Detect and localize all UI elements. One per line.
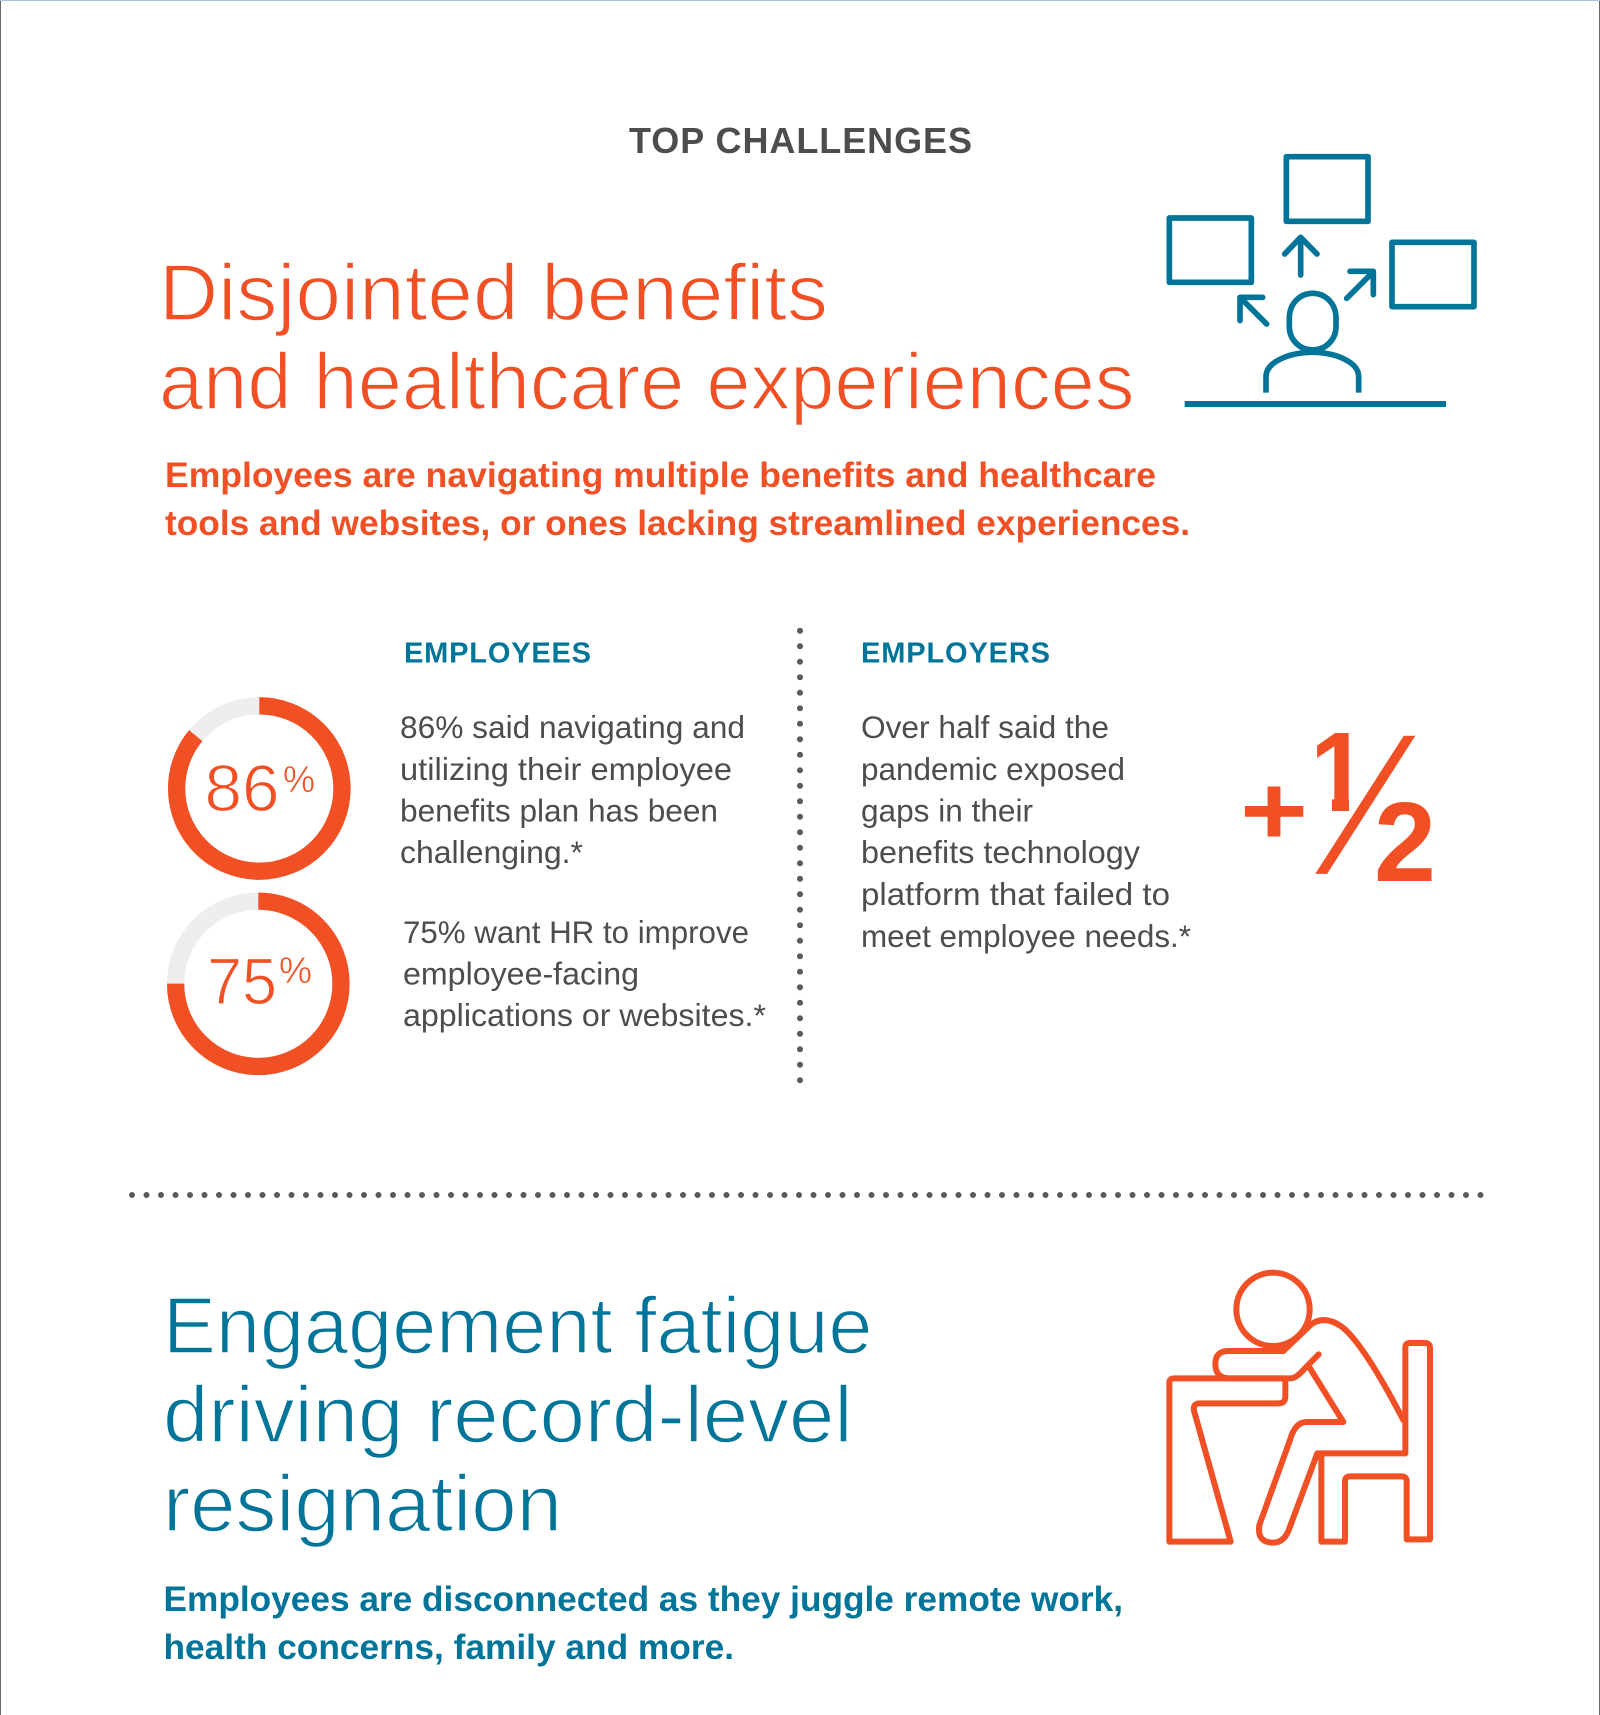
icon: tired person at desk (1169, 1273, 1430, 1543)
heading: engagement fatigue: driving record-level (163, 1370, 852, 1459)
heading: disjointed benefits: Disjointed benefits (159, 248, 828, 337)
heading: disjointed benefits (159, 248, 1134, 426)
text block: employers stat: benefits technology (861, 834, 1140, 870)
heading: disjointed benefits: and healthcare experiences (159, 337, 1134, 426)
text block: employers stat: platform that failed to (861, 876, 1170, 912)
heading: engagement fatigue (163, 1281, 872, 1548)
text block: 75% stat: applications or websites.* (403, 997, 766, 1033)
text block: employers stat: Over half said the (861, 709, 1109, 745)
donut chart: 86% (177, 706, 342, 871)
donut chart: 75%: % (279, 950, 312, 991)
text block: employers stat: gaps in their (861, 792, 1033, 828)
text block: 86% stat: utilizing their employee (400, 751, 732, 787)
donut chart: 75% (176, 901, 341, 1066)
donut chart: 75%: 75 (207, 944, 277, 1018)
icon: person with screens (1169, 157, 1474, 407)
text block: employers stat: meet employee needs.* (861, 918, 1191, 954)
stat: more than one half: / (1299, 702, 1430, 912)
text block: employers stat (861, 709, 1191, 954)
text block: 86% stat (400, 709, 745, 870)
heading: engagement fatigue: resignation (163, 1459, 562, 1548)
heading: engagement fatigue: Engagement fatigue (163, 1281, 872, 1370)
text block: 86% stat: challenging.* (400, 834, 583, 870)
text block: 86% stat: 86% said navigating and (400, 709, 745, 745)
subheading: navigating tools: tools and websites, or ones lacking streamlined experiences. (165, 504, 1190, 543)
stat: more than one half: 2 (1374, 779, 1436, 905)
text block: 75% stat: 75% want HR to improve (403, 914, 749, 950)
text block: 75% stat (403, 914, 766, 1033)
stat: more than one half: + (1240, 755, 1308, 865)
donut chart: 86%: % (283, 759, 315, 800)
text block: 75% stat: employee-facing (403, 956, 639, 992)
subheading: disconnected employees (164, 1580, 1123, 1667)
text block: employers stat: pandemic exposed (861, 751, 1125, 787)
title: TOP CHALLENGES (629, 120, 972, 161)
subheading: disconnected employees: health concerns, family and more. (164, 1628, 734, 1667)
label: employees: EMPLOYEES (404, 638, 591, 670)
subheading: navigating tools: Employees are navigating multiple benefits and healthcare (165, 456, 1156, 495)
stat: more than one half: 1 (1310, 709, 1368, 835)
subheading: disconnected employees: Employees are disconnected as they juggle remote work, (164, 1580, 1123, 1619)
label: employers: EMPLOYERS (861, 638, 1050, 670)
donut chart: 86%: 86 (204, 751, 280, 825)
stat: more than one half (1244, 733, 1432, 881)
subheading: navigating tools (165, 456, 1190, 543)
text block: 86% stat: benefits plan has been (400, 792, 718, 828)
